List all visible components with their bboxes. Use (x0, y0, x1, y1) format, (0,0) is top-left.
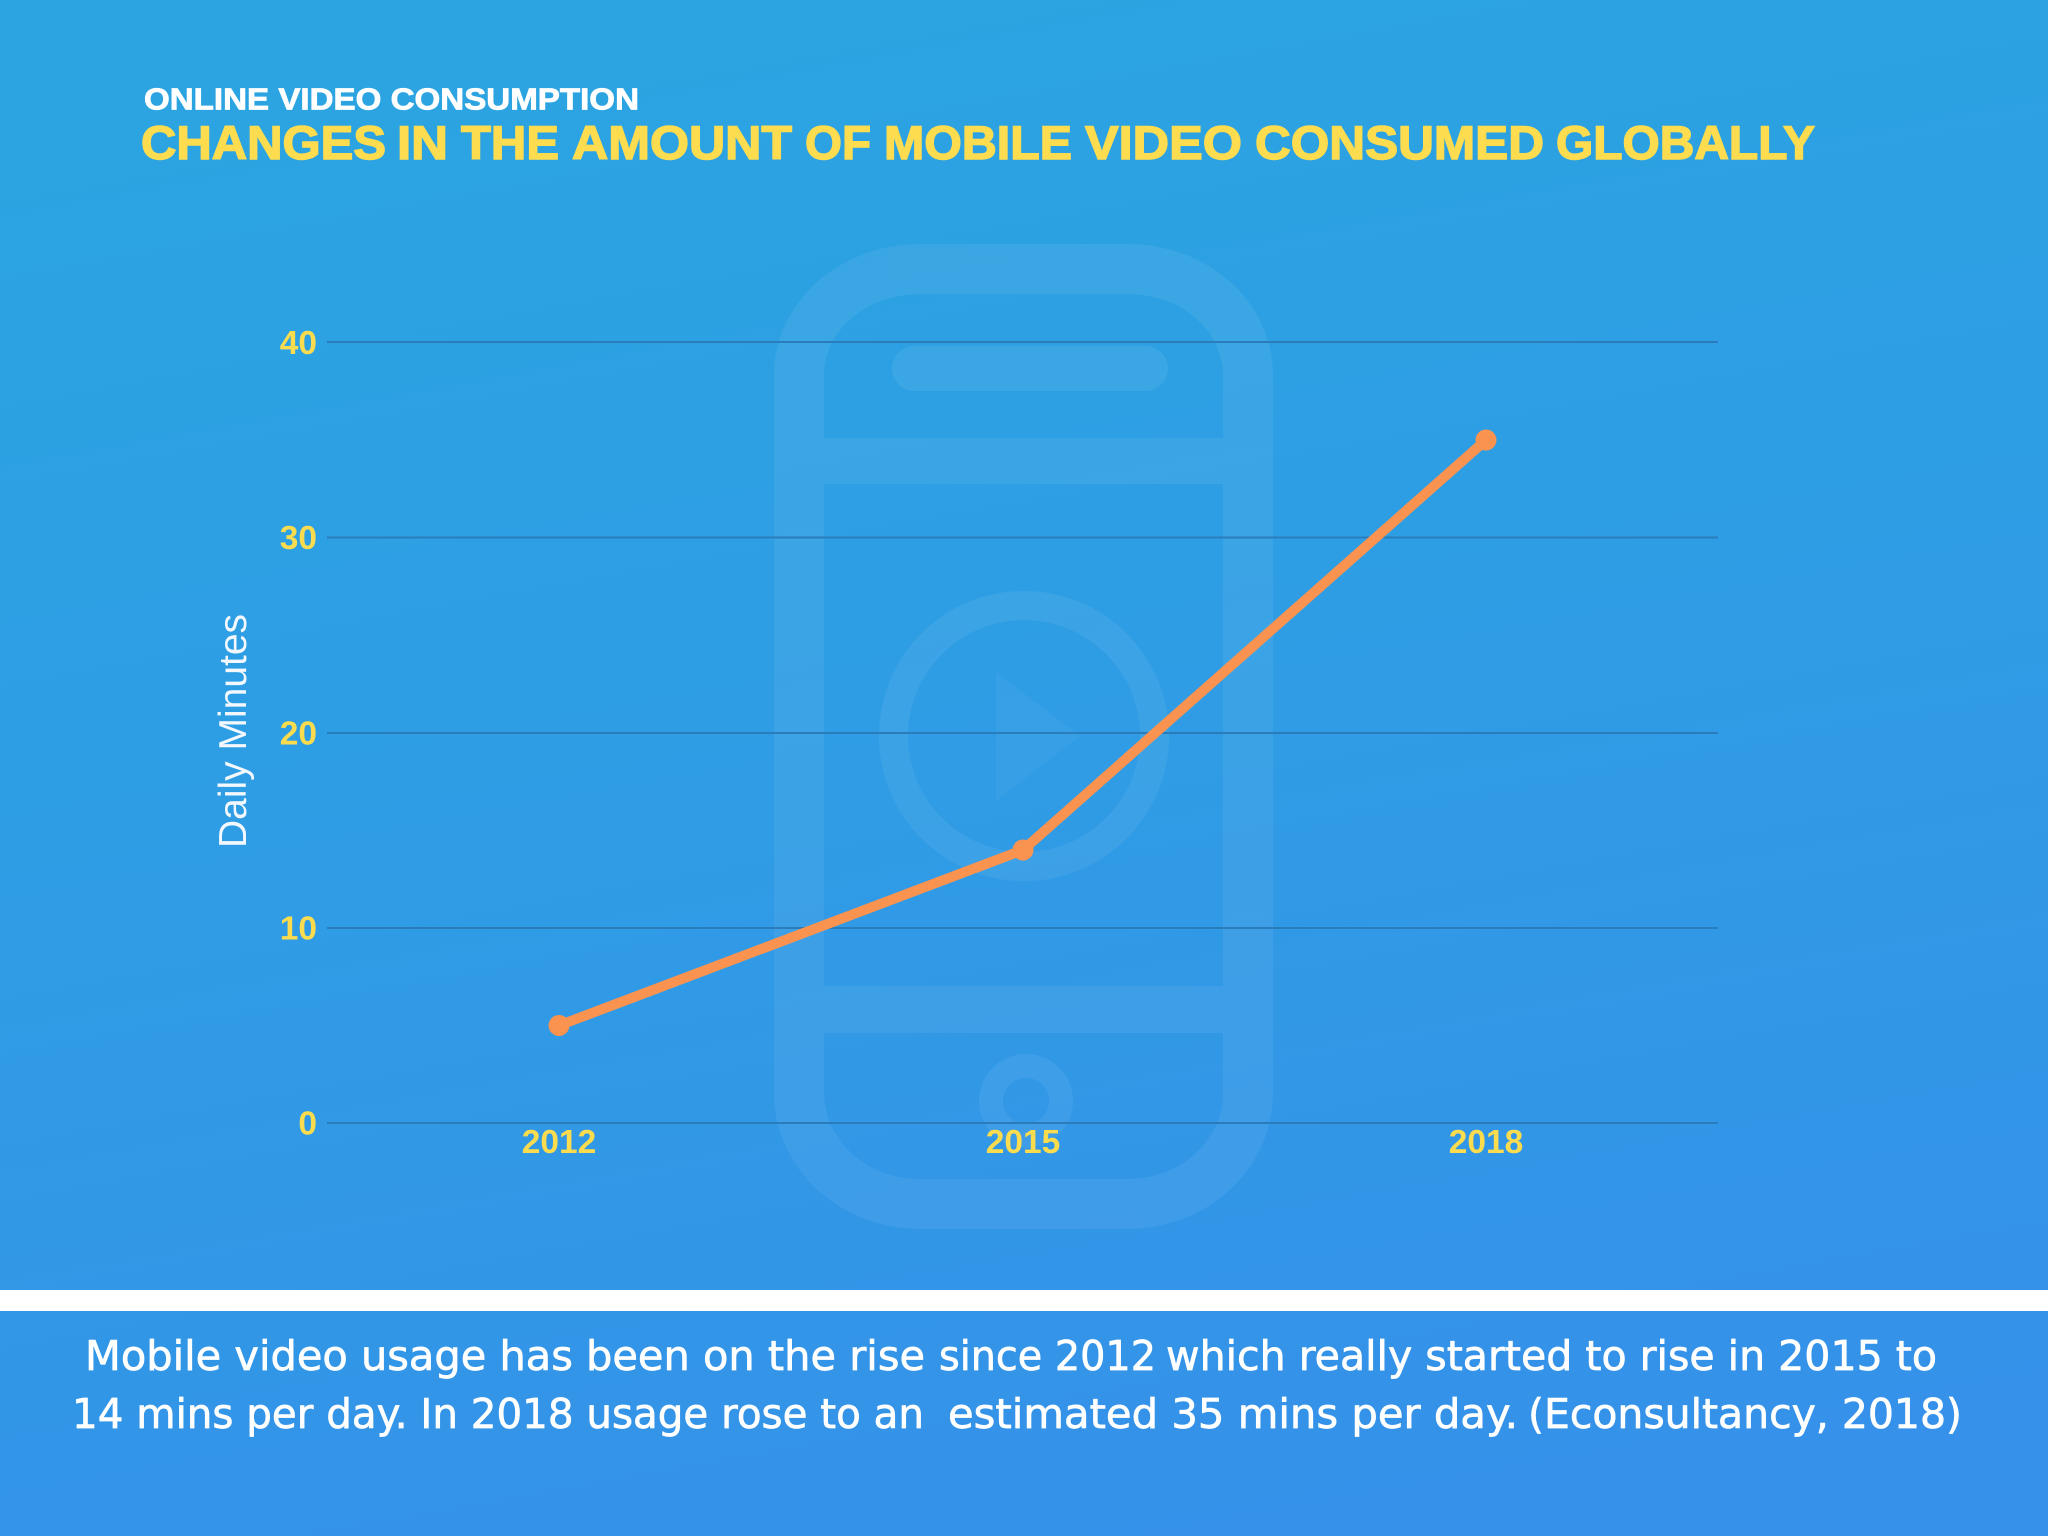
title: MOBILE (884, 116, 1072, 169)
description text: estimated 35 mins per day. (948, 1390, 1518, 1438)
title: AMOUNT (572, 116, 792, 169)
title: THE (461, 116, 559, 169)
description text (72, 1332, 1962, 1438)
top screen bar (800, 438, 1248, 484)
x axis labels (522, 1124, 1523, 1161)
description text: since 2012 (939, 1332, 1156, 1380)
line chart (212, 325, 1718, 1161)
icon: play triangle (996, 672, 1080, 801)
phone body (799, 269, 1248, 1204)
icon: phone with play button watermark (799, 269, 1248, 1204)
data points (548, 430, 1496, 1036)
y axis title: Daily Minutes (212, 614, 255, 848)
title: VIDEO (1085, 116, 1242, 169)
y axis tick labels: 0 (298, 1106, 317, 1142)
y axis tick labels: 10 (280, 910, 317, 948)
x axis labels: 2018 (1449, 1124, 1523, 1161)
y axis tick labels: 40 (280, 325, 317, 362)
x axis labels: 2012 (522, 1124, 596, 1161)
play circle (894, 606, 1154, 866)
y axis tick labels (280, 325, 317, 1142)
title: OF (805, 116, 871, 169)
white divider band (0, 1290, 2048, 1311)
speaker pill (892, 346, 1168, 391)
x axis labels: 2015 (986, 1124, 1060, 1161)
description text: which really started to rise in 2015 to (1166, 1332, 1937, 1380)
home button (991, 1066, 1061, 1136)
bottom screen bar (800, 986, 1248, 1033)
data line (559, 440, 1486, 1026)
title: CONSUMED (1255, 116, 1544, 169)
grid lines (327, 342, 1718, 1123)
title: IN (397, 116, 448, 169)
description text: 14 mins per day. In 2018 usage rose to an (72, 1390, 924, 1438)
description text: (Econsultancy, 2018) (1528, 1390, 1962, 1438)
y axis tick labels: 30 (280, 520, 317, 557)
title: GLOBALLY (1556, 116, 1815, 169)
description text: Mobile video usage has been on the rise (85, 1332, 925, 1380)
title: CHANGES (141, 116, 386, 169)
y axis tick labels: 20 (280, 716, 317, 752)
eyebrow heading: ONLINE VIDEO CONSUMPTION (144, 82, 639, 116)
